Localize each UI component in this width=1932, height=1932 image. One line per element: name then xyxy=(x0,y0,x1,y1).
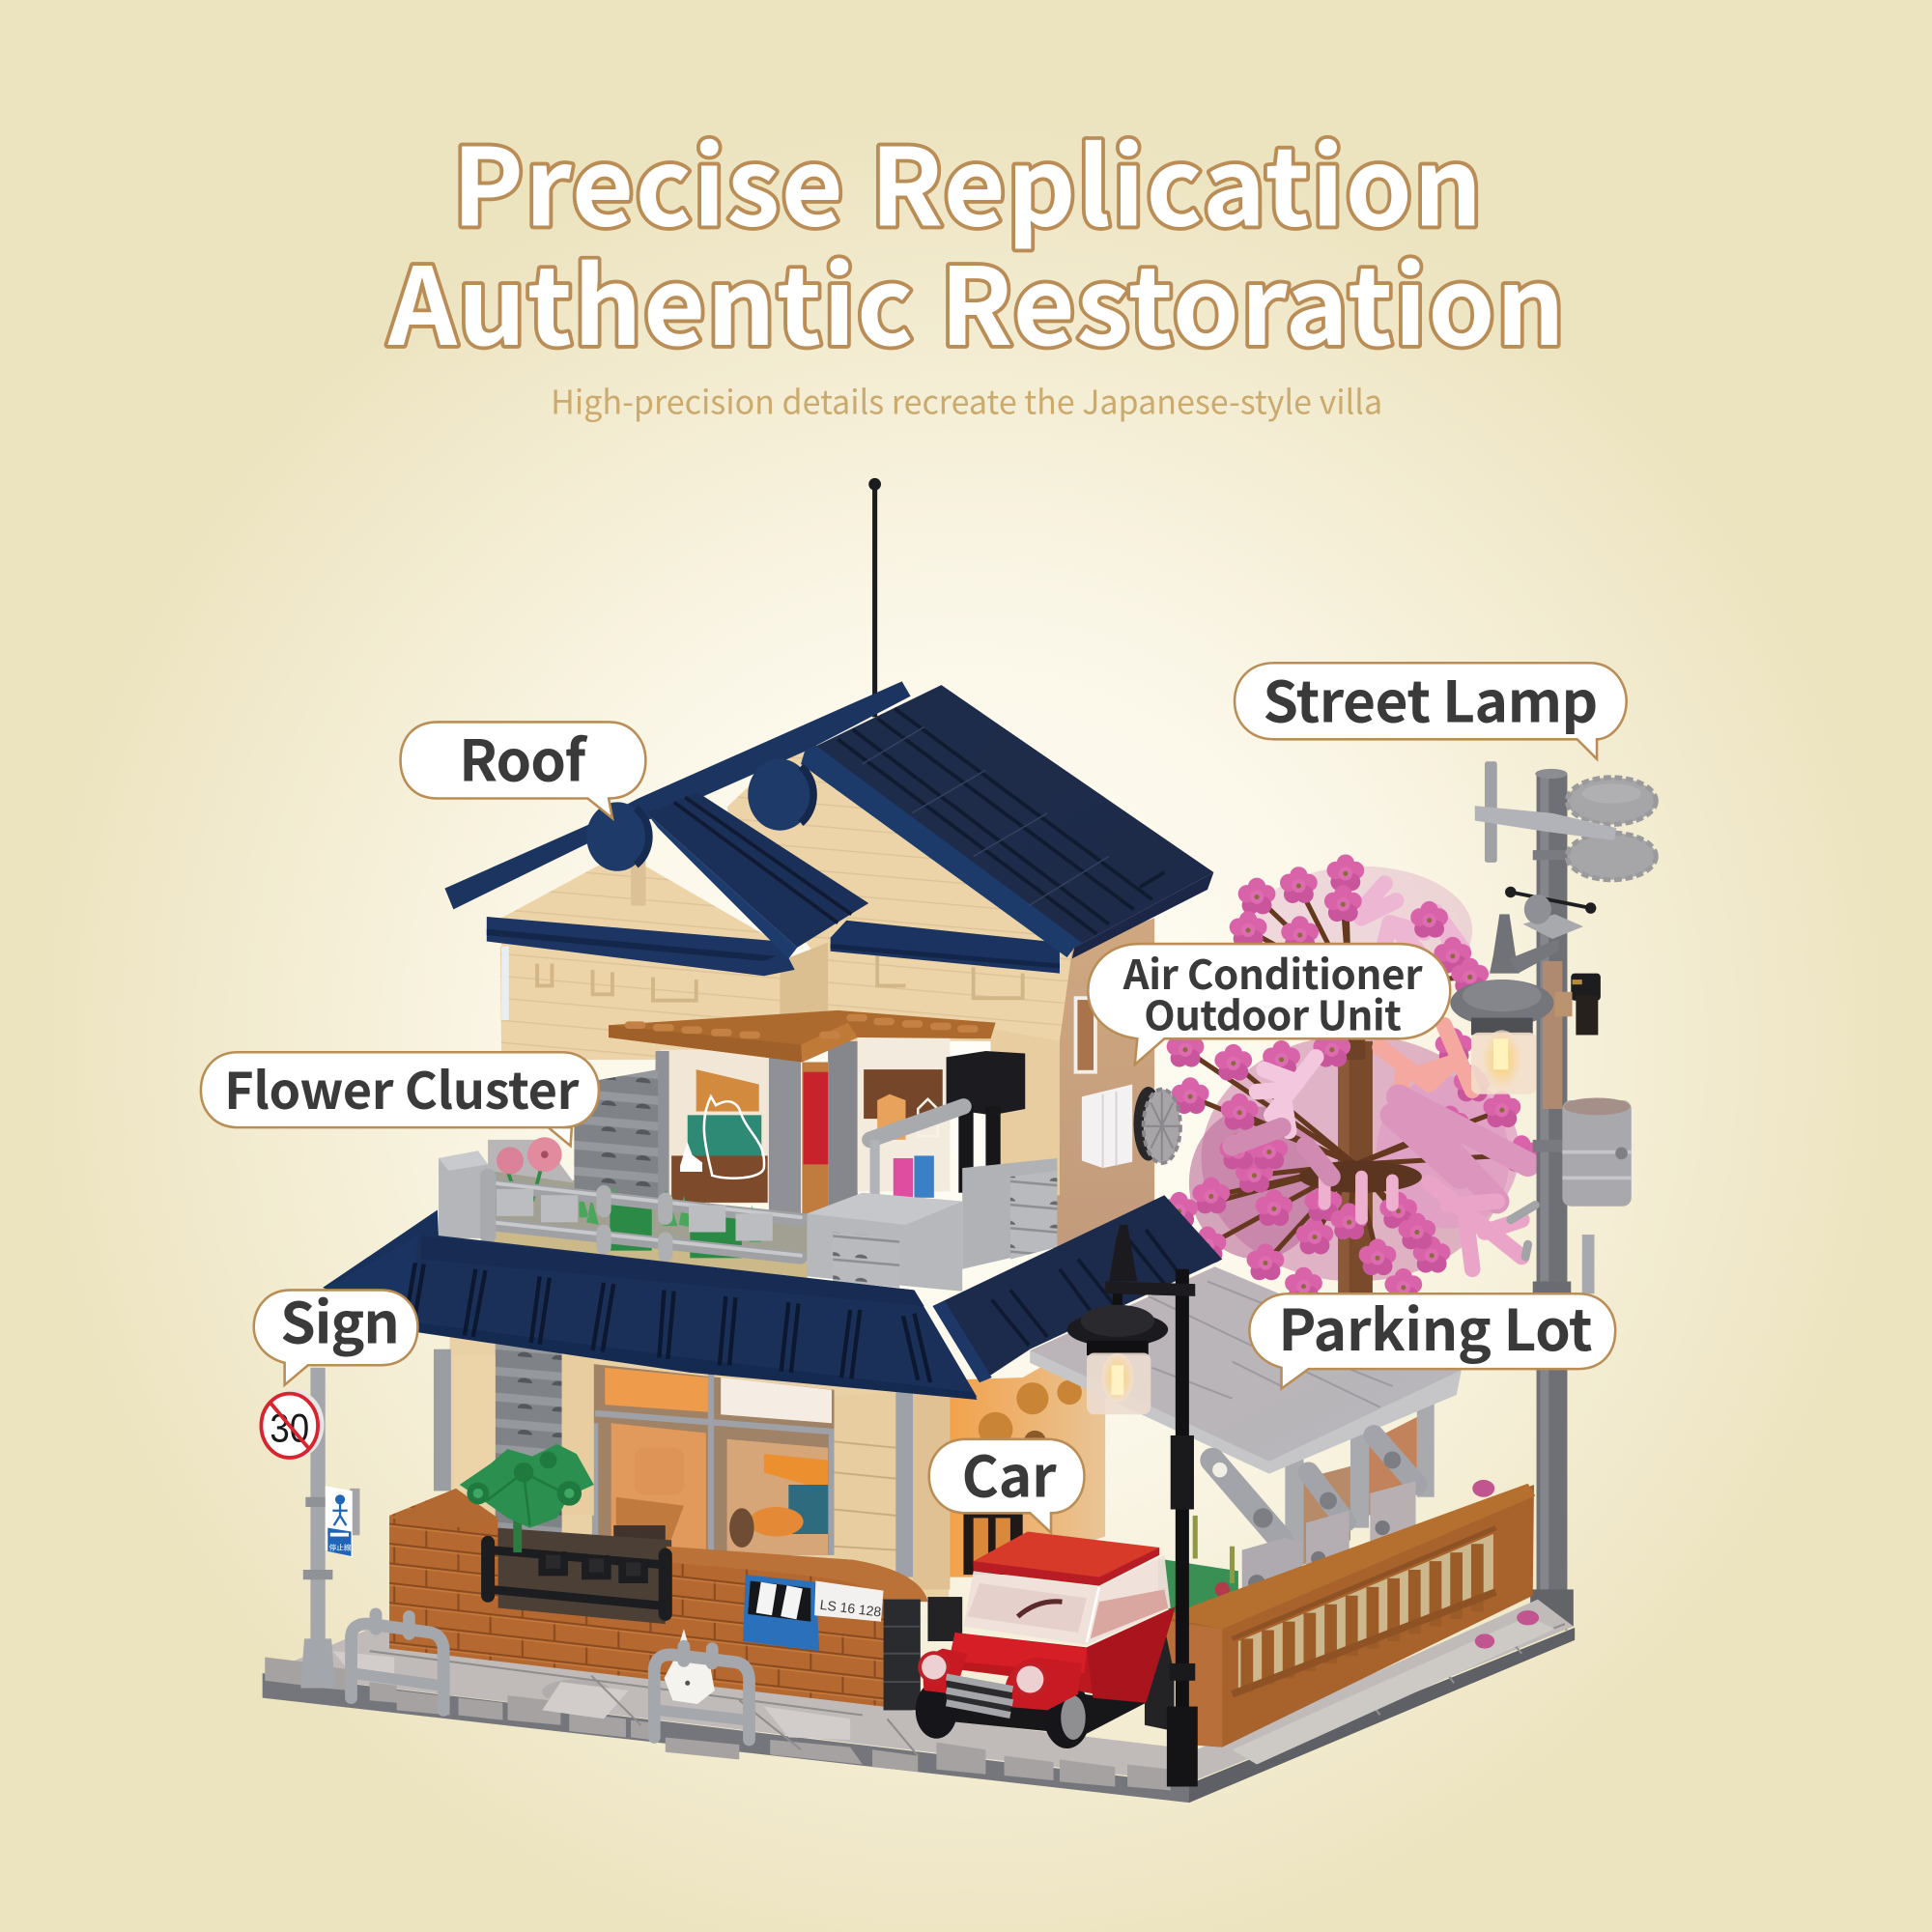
drain pipe xyxy=(631,856,645,906)
black corner xyxy=(884,1600,921,1710)
top arm and insulators xyxy=(1475,761,1656,939)
callout: air conditioner outdoor unit: Air Conditioner xyxy=(1122,943,1423,1002)
railing brackets xyxy=(497,1189,773,1240)
window openings upper xyxy=(574,1010,1025,1222)
callout: flower cluster: Flower Cluster xyxy=(224,1051,580,1124)
roof ribs xyxy=(404,1263,930,1382)
foliage underlay xyxy=(1189,867,1520,1282)
black air conditioner pipes xyxy=(947,1051,1025,1193)
balcony xyxy=(439,1137,1057,1292)
mailbox xyxy=(743,1575,819,1651)
subtitle: High-precision details recreate the Japanese-style villa xyxy=(551,376,1382,424)
left drain pipe xyxy=(434,1350,451,1491)
sign post xyxy=(261,1368,359,1688)
black stack behind lamp xyxy=(1145,1629,1175,1731)
name plate: LS 16 128 xyxy=(819,1597,882,1620)
callout: street lamp: Street Lamp xyxy=(1263,656,1598,738)
dark door xyxy=(963,1513,1023,1575)
upper right gable xyxy=(727,752,1072,1041)
ring around trunk xyxy=(1298,1161,1422,1218)
main front slope xyxy=(323,1234,977,1397)
right room xyxy=(858,1037,950,1191)
callout: sign xyxy=(254,1277,417,1385)
back ridge xyxy=(444,681,911,909)
callout: car xyxy=(929,1432,1084,1533)
brown side wall xyxy=(1054,918,1154,1269)
glass xyxy=(1087,1353,1151,1414)
blossoms xyxy=(1160,854,1541,1305)
pole xyxy=(1167,1269,1198,1786)
body xyxy=(955,1606,1176,1703)
callout: flower cluster xyxy=(201,1051,599,1146)
black street lamp xyxy=(1067,1225,1198,1786)
laundry rack xyxy=(870,1106,963,1202)
orange lintel bricks xyxy=(609,1010,996,1062)
pedestrian sign: 停止線 xyxy=(329,1543,352,1553)
hood xyxy=(1067,1293,1168,1355)
side part back xyxy=(323,1210,439,1292)
lower right wall xyxy=(828,947,1060,1047)
tall street lamp xyxy=(1450,761,1656,1631)
top cone xyxy=(1109,1225,1137,1282)
lower roof xyxy=(323,1195,1222,1400)
antenna xyxy=(868,478,881,717)
title: Precise Replication xyxy=(452,100,1482,256)
dark opening behind low railing xyxy=(497,1528,671,1633)
title: Authentic Restoration xyxy=(387,220,1565,376)
left room xyxy=(656,1050,769,1204)
chassis and wheels xyxy=(916,1682,1146,1748)
wall roundels xyxy=(979,1380,1082,1453)
glass cabin xyxy=(963,1555,1171,1645)
branches xyxy=(1179,873,1521,1263)
trunk xyxy=(1338,980,1373,1293)
air conditioner outdoor unit xyxy=(1082,1084,1180,1168)
vent column lower xyxy=(496,1343,562,1552)
pole xyxy=(1530,769,1574,1631)
pedestrian sign xyxy=(326,1486,359,1557)
column blocks xyxy=(1242,1481,1416,1608)
cat decal xyxy=(681,1096,764,1179)
eaves xyxy=(487,917,1060,976)
bollards xyxy=(352,1614,443,1710)
upper walls xyxy=(500,752,1154,1269)
black railing xyxy=(488,1543,666,1614)
title xyxy=(387,100,1565,376)
baseplate xyxy=(263,1628,1575,1803)
name plate xyxy=(814,1580,884,1622)
lamp head xyxy=(1450,914,1559,1094)
main roof xyxy=(444,681,1213,958)
headlights xyxy=(918,1651,1047,1696)
sidewalk paving xyxy=(265,1600,1574,1790)
inner corner xyxy=(780,943,828,1047)
lit side wall xyxy=(949,1331,1105,1577)
brackets xyxy=(1212,1435,1417,1540)
left gable xyxy=(501,853,788,1041)
callout: parking lot xyxy=(1249,1285,1615,1389)
callout: air conditioner outdoor unit xyxy=(1088,943,1450,1065)
red cabinet xyxy=(804,1072,828,1164)
lower clamps xyxy=(1511,1205,1535,1257)
planter greens xyxy=(579,1182,761,1258)
callout: car: Car xyxy=(962,1432,1057,1514)
speed limit sign xyxy=(261,1390,324,1459)
small side window xyxy=(1076,998,1095,1072)
potted plant xyxy=(460,1444,594,1552)
railing xyxy=(488,1177,801,1258)
light pink coral pieces, back xyxy=(1361,884,1463,963)
lower left wall xyxy=(500,947,780,1060)
balcony wall left xyxy=(439,1140,807,1282)
wall trim xyxy=(537,955,1023,1001)
speed limit sign: 30 xyxy=(270,1405,309,1450)
callout: roof xyxy=(401,716,645,818)
transformer can xyxy=(1562,1097,1632,1207)
grey vent column xyxy=(574,1069,658,1202)
roof xyxy=(974,1531,1159,1583)
cream pillars xyxy=(835,1392,895,1567)
callout: roof: Roof xyxy=(459,716,588,798)
brick wall xyxy=(389,1489,962,1710)
callout: sign: Sign xyxy=(280,1277,400,1359)
right roof slope xyxy=(805,685,1213,948)
front small roof xyxy=(647,792,868,948)
arm xyxy=(1105,1282,1195,1296)
white cat xyxy=(665,1629,715,1704)
callout: parking lot: Parking Lot xyxy=(1278,1285,1593,1367)
pink studs xyxy=(1472,1480,1539,1649)
callout: street lamp xyxy=(1235,656,1627,759)
disc right xyxy=(748,759,813,831)
grille xyxy=(947,1676,1012,1716)
front bollard xyxy=(654,1646,750,1740)
pole xyxy=(300,1368,335,1688)
brown fence xyxy=(1163,1480,1539,1747)
parking lot roof xyxy=(1030,1266,1462,1620)
ground floor xyxy=(434,1331,1105,1602)
back wall xyxy=(450,1337,949,1602)
red car xyxy=(916,1531,1176,1748)
black bracket xyxy=(1555,974,1601,1035)
center grey pillars xyxy=(769,1054,801,1220)
callout: air conditioner outdoor unit: Outdoor Unit xyxy=(1144,983,1402,1042)
disc left xyxy=(586,802,649,871)
shop window xyxy=(593,1364,835,1555)
cherry blossom tree xyxy=(1160,854,1541,1305)
roof plane xyxy=(1030,1266,1462,1474)
right balcony block xyxy=(807,1158,1057,1292)
right lower roof xyxy=(933,1195,1222,1382)
columns xyxy=(1285,1392,1435,1565)
garden greens xyxy=(1158,1516,1238,1620)
pink flowers on balcony xyxy=(497,1137,562,1202)
pink coral pieces, front xyxy=(1233,1025,1528,1269)
